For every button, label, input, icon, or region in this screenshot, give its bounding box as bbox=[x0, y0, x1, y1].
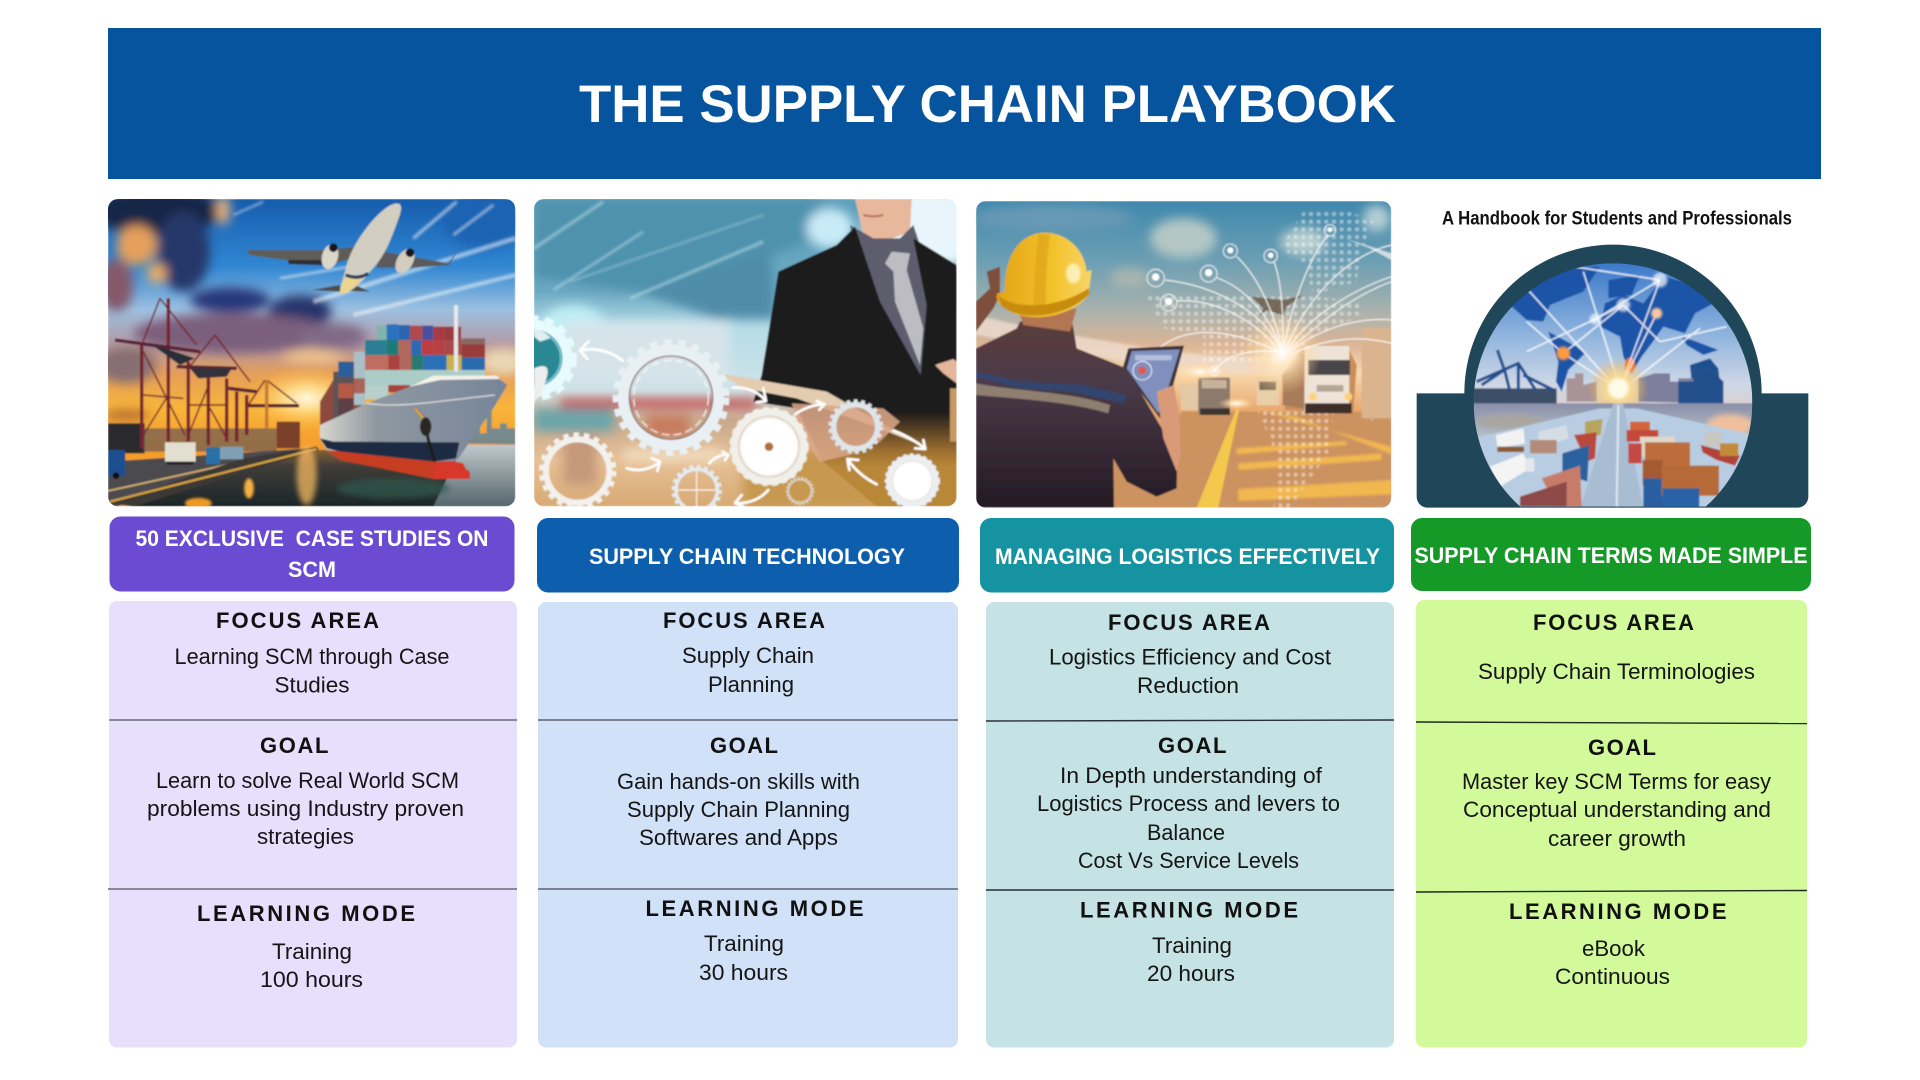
clipboard bbox=[720, 373, 917, 443]
panel: logistics details bbox=[986, 602, 1394, 1048]
goal: Logistics Process and levers to bbox=[1037, 791, 1340, 816]
plane silhouette bbox=[1252, 295, 1303, 317]
goal: Gain hands-on skills with bbox=[617, 769, 860, 794]
glow bbox=[1247, 318, 1320, 391]
learning mode: 30 hours bbox=[699, 960, 788, 985]
dark arch bbox=[1417, 245, 1808, 508]
network lines bbox=[1527, 265, 1727, 388]
learning mode: Training bbox=[1152, 933, 1232, 958]
focus area: Reduction bbox=[1137, 673, 1239, 698]
image: port, cargo ship and airplane bbox=[93, 188, 527, 509]
quay bbox=[1473, 408, 1753, 508]
worker bbox=[976, 267, 1181, 508]
learning mode bbox=[1509, 899, 1726, 989]
goal bbox=[1462, 735, 1771, 851]
goal bbox=[147, 733, 464, 849]
man in suit bbox=[753, 199, 957, 506]
learning mode: Training bbox=[272, 939, 352, 964]
trucks and containers left bbox=[1490, 419, 1603, 507]
containers bbox=[320, 324, 485, 428]
learning mode bbox=[646, 896, 864, 985]
header: supply chain terms made simple: SUPPLY CHAIN TERMS MADE SIMPLE bbox=[1414, 543, 1808, 568]
globe gear bbox=[534, 314, 578, 402]
panel: case studies details bbox=[108, 601, 517, 1048]
focus area: Supply Chain bbox=[682, 643, 814, 668]
image: engineer with tablet and trucks bbox=[973, 201, 1391, 508]
panel: terminology details bbox=[1416, 600, 1807, 1048]
panel: technology details bbox=[538, 602, 958, 1048]
water bbox=[1473, 403, 1753, 438]
learning mode: LEARNING MODE bbox=[1080, 898, 1298, 922]
sun bbox=[1590, 360, 1647, 404]
header: supply chain technology bbox=[537, 518, 959, 592]
header: managing logistics effectively: MANAGING LOGISTICS EFFECTIVELY bbox=[995, 544, 1380, 569]
trucks bbox=[108, 442, 243, 479]
focus area bbox=[1478, 610, 1755, 684]
goal: career growth bbox=[1548, 826, 1686, 851]
header: 50 exclusive case studies: SCM bbox=[288, 557, 336, 582]
goal bbox=[617, 733, 860, 850]
curved overpass bbox=[976, 316, 1280, 374]
focus area: FOCUS AREA bbox=[663, 608, 825, 633]
goal: Balance bbox=[1147, 820, 1225, 845]
focus area: Logistics Efficiency and Cost bbox=[1049, 644, 1331, 670]
learning mode bbox=[1080, 898, 1298, 986]
goal bbox=[1037, 733, 1340, 873]
focus area: Learning SCM through Case bbox=[174, 644, 450, 669]
header: supply chain technology: SUPPLY CHAIN TECHNOLOGY bbox=[589, 544, 905, 569]
small ship bbox=[1701, 432, 1740, 466]
goal: GOAL bbox=[1588, 735, 1656, 760]
hard hat bbox=[997, 233, 1092, 317]
airplane bbox=[246, 203, 459, 294]
learning mode: LEARNING MODE bbox=[197, 901, 415, 926]
header: managing logistics effectively bbox=[980, 518, 1394, 592]
focus area bbox=[663, 608, 825, 697]
goal: Softwares and Apps bbox=[639, 825, 838, 850]
focus area: FOCUS AREA bbox=[1108, 610, 1270, 635]
city skyline bbox=[1473, 368, 1723, 405]
goal: In Depth understanding of bbox=[1060, 763, 1323, 788]
goal: Conceptual understanding and bbox=[1463, 797, 1771, 822]
focus area: Studies bbox=[274, 672, 350, 698]
goal: GOAL bbox=[260, 733, 328, 758]
tablet bbox=[1123, 346, 1184, 418]
arrows bbox=[580, 342, 925, 507]
handbook tagline: A Handbook for Students and Professionals bbox=[1442, 208, 1792, 230]
header: 50 exclusive case studies bbox=[110, 516, 514, 592]
header: 50 exclusive case studies: 50 EXCLUSIVE CASE STUDIES ON bbox=[136, 526, 488, 551]
header: supply chain terms made simple bbox=[1411, 518, 1811, 591]
road bbox=[1113, 408, 1391, 508]
title banner bbox=[108, 28, 1821, 179]
goal: Supply Chain Planning bbox=[627, 797, 850, 822]
learning mode: LEARNING MODE bbox=[646, 896, 864, 921]
goal: Master key SCM Terms for easy bbox=[1462, 769, 1771, 794]
goal: problems using Industry proven bbox=[147, 796, 464, 821]
goal: strategies bbox=[257, 824, 354, 849]
goal: Learn to solve Real World SCM bbox=[156, 768, 459, 793]
truck big bbox=[1282, 345, 1357, 413]
learning mode: Training bbox=[704, 931, 784, 956]
world map bbox=[1508, 267, 1722, 402]
learning mode bbox=[197, 901, 415, 992]
focus area: FOCUS AREA bbox=[1533, 610, 1694, 635]
learning mode: 100 hours bbox=[260, 967, 363, 992]
gears bbox=[542, 343, 938, 513]
goal: GOAL bbox=[710, 733, 778, 758]
network lines bbox=[1147, 235, 1391, 370]
containers right bbox=[1627, 422, 1719, 508]
focus area: Supply Chain Terminologies bbox=[1478, 659, 1755, 684]
map dots bbox=[1147, 212, 1391, 508]
image: businessman with gears bbox=[534, 199, 957, 506]
learning mode: eBook bbox=[1582, 936, 1646, 961]
focus area: Planning bbox=[708, 672, 794, 697]
ship hull bbox=[320, 376, 507, 479]
port crane bbox=[1477, 350, 1553, 392]
image: handbook cover bbox=[1417, 208, 1808, 508]
focus area: FOCUS AREA bbox=[216, 608, 379, 633]
goal: GOAL bbox=[1158, 733, 1226, 758]
location pins bbox=[1133, 225, 1336, 380]
learning mode: LEARNING MODE bbox=[1509, 899, 1726, 924]
focus area bbox=[174, 608, 450, 698]
hand bbox=[792, 403, 900, 462]
title: THE SUPPLY CHAIN PLAYBOOK bbox=[579, 75, 1396, 134]
cranes bbox=[115, 298, 299, 448]
globe picture bbox=[1473, 262, 1753, 508]
goal: Cost Vs Service Levels bbox=[1078, 848, 1299, 873]
learning mode: 20 hours bbox=[1147, 961, 1235, 986]
small trucks bbox=[1181, 328, 1391, 418]
focus area bbox=[1049, 610, 1331, 698]
learning mode: Continuous bbox=[1555, 964, 1670, 989]
